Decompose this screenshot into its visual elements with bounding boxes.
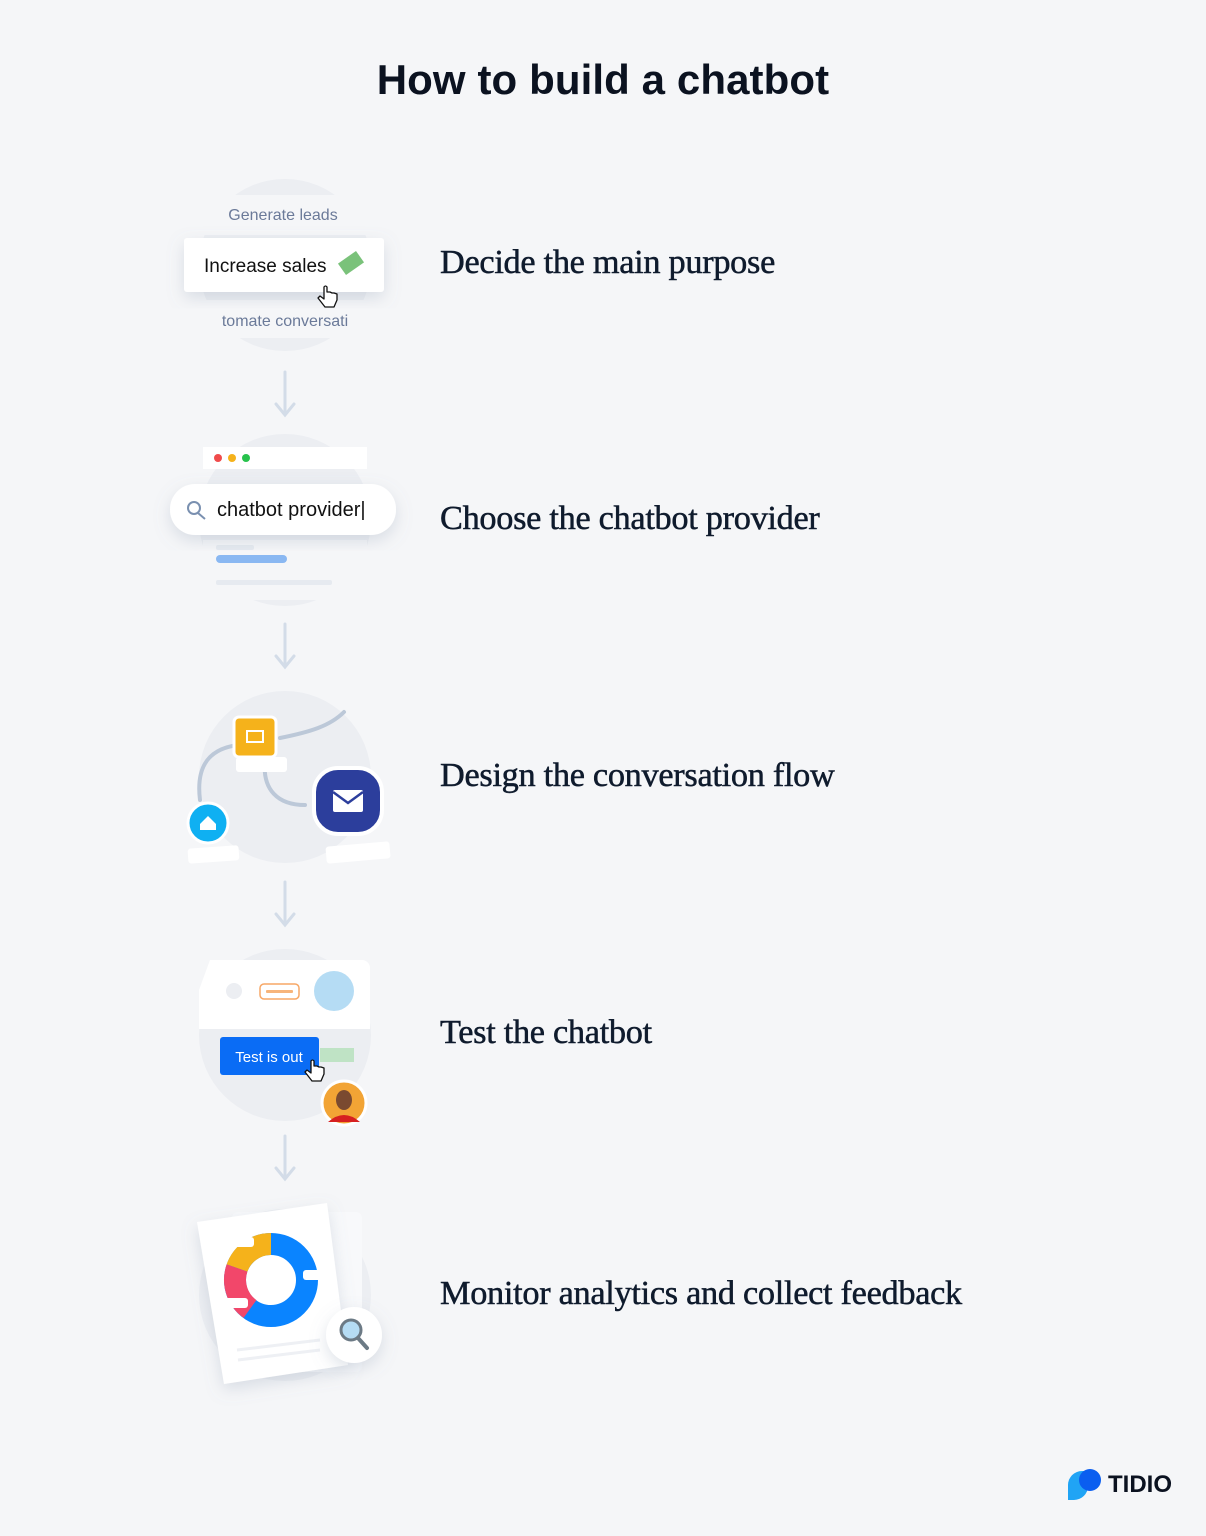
step 1 text: Decide the main purpose xyxy=(440,243,775,281)
icon: purpose xyxy=(184,179,384,351)
logo text: TIDIO xyxy=(1108,1471,1172,1498)
title: How to build a chatbot xyxy=(377,56,829,103)
icon: provider: chatbot provider| xyxy=(217,499,366,521)
icon: provider xyxy=(170,434,396,606)
icon: test xyxy=(199,949,371,1125)
arrow xyxy=(276,624,294,667)
icon: analytics xyxy=(197,1203,382,1384)
icon: purpose: tomate conversati xyxy=(222,313,348,330)
step 4 text: Test the chatbot xyxy=(440,1013,652,1051)
icon: purpose: Increase sales xyxy=(204,256,327,277)
logo icon xyxy=(1068,1469,1101,1500)
arrow xyxy=(276,372,294,415)
arrow xyxy=(276,882,294,925)
icon: test: Test is out xyxy=(235,1049,304,1066)
icon: purpose: Generate leads xyxy=(228,207,338,224)
arrow xyxy=(276,1136,294,1179)
icon: flow xyxy=(188,691,391,864)
step 3 text: Design the conversation flow xyxy=(440,756,834,794)
step 2 text: Choose the chatbot provider xyxy=(440,499,820,537)
step 5 text: Monitor analytics and collect feedback xyxy=(440,1274,962,1312)
